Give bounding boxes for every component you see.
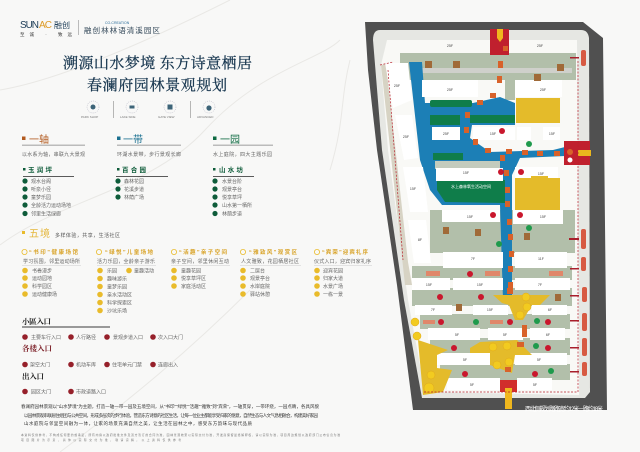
list: scene four: 驿站休憩	[250, 291, 270, 298]
legal note: 本资料仅供参考，不构成任何要约或承诺，所有内容以政府批准文件及双方签订的合同为准，园林景观效果以实际交付为准，开发商保留最终解释权，请以实际为准，项目周边规划以政府部门公布信息为准	[21, 433, 340, 437]
list: scene one: 书卷漫步	[32, 268, 52, 274]
list: scene two: 活力乐园，全龄亲子游乐	[97, 258, 155, 265]
building labels: 25F	[447, 88, 454, 92]
list: community entrances: 次入口大门	[158, 334, 183, 341]
list: third garden: 水景台阶	[222, 178, 242, 185]
panel: one garden: 水上庭院，四大主题乐园	[213, 151, 272, 158]
list: scene one: 运动园地	[32, 275, 52, 282]
list: exits	[22, 371, 106, 396]
list: second garden: 林荫广场	[124, 194, 144, 201]
map shadow border	[365, 22, 607, 410]
project name: CO-CREATION	[105, 21, 130, 25]
building labels: 25F	[540, 88, 547, 92]
panel: one belt	[117, 134, 181, 158]
yellow activity zones	[418, 98, 560, 395]
panel: one axis: 以水系为轴，串联九大景观	[22, 151, 85, 158]
list: first garden: 听泉小径	[31, 186, 51, 193]
description paragraph: 以园林景观串联居住组团与公共空间，形成多层次的步行体验，营造东方诗意的社区生活，让每一位业主都能享受归家的惬意，自然生态与人文气息相融合，构建美好家园	[24, 412, 319, 419]
panel: one garden	[213, 134, 273, 158]
green lawns	[430, 100, 515, 203]
orange circulation route	[464, 61, 560, 372]
brand logo: SUN	[20, 20, 39, 31]
map lawn label: 水上森林氧生活动空间	[451, 183, 491, 189]
list: exits: 市政道路入口	[76, 388, 106, 396]
red boundary line	[380, 60, 578, 392]
list: scene two: 科学探索区	[107, 300, 132, 306]
brand logo: AC	[39, 20, 52, 31]
list: community entrances	[22, 316, 183, 341]
list: scene three: 家庭活动区	[181, 283, 206, 290]
building labels: 5F	[533, 383, 538, 387]
building labels: 15F	[426, 283, 433, 287]
list: building entrances: 各楼入口	[22, 343, 52, 353]
list: second garden	[115, 165, 168, 201]
building labels: 6F	[546, 333, 551, 337]
list: building entrances: 住宅单元门禁	[112, 362, 142, 368]
building labels: 15F	[463, 171, 470, 175]
list: scene two: 乐园	[107, 268, 117, 274]
brand logo	[20, 20, 72, 38]
right gate	[564, 141, 591, 165]
yellow markers	[411, 293, 531, 393]
list: scene five: 迎宾花园	[323, 268, 343, 274]
list: community entrances: 小區入口	[22, 316, 51, 326]
list: third garden: 观景亭台	[222, 186, 242, 193]
list: scene four: 水岸庭院	[250, 283, 270, 290]
river and lagoon	[409, 62, 565, 300]
list: exits: 园区大门	[31, 388, 51, 396]
building labels: 15F	[467, 215, 474, 219]
panel: one belt: 一带	[123, 134, 143, 146]
salmon parking labels	[423, 271, 563, 324]
site plan map	[365, 22, 607, 413]
legal note	[21, 433, 340, 442]
landscape pavilions	[425, 61, 564, 311]
road caption: 西北侧规划路路宽约12米一路约18米	[525, 405, 603, 413]
list: third garden: 悦享草坪	[222, 194, 242, 201]
four feature icons	[81, 101, 215, 119]
four feature icons: ADVANCED	[197, 115, 214, 119]
list: scene two: 童趣活动	[134, 268, 154, 274]
building labels: 8F	[418, 238, 423, 242]
heading: five scenes: 五境	[29, 227, 50, 240]
list: scene five: 水景广场	[323, 283, 343, 290]
list: scene four: 观景亭台	[250, 275, 270, 282]
list: third garden: 山水第一栖所	[222, 202, 252, 209]
list: community entrances: 人行路径	[76, 334, 96, 341]
building labels: 11F	[538, 257, 545, 261]
list: scene one	[22, 248, 81, 298]
building labels: 15F	[549, 132, 556, 136]
building labels: 25F	[394, 84, 401, 88]
list: third garden	[212, 165, 254, 218]
list: scene three: 悦享草坪区	[181, 275, 206, 282]
list: scene one: 学习氛围，邻里运动场所	[23, 258, 80, 265]
building labels: 25F	[443, 132, 450, 136]
list: building entrances: 机动车库	[76, 362, 96, 368]
list: first garden: 童梦乐园	[31, 194, 51, 201]
building labels: 5F	[455, 333, 460, 337]
list: community entrances: 主要车行入口	[31, 334, 61, 341]
list: scene three: 童趣花园	[181, 268, 201, 274]
description paragraph: 春澜府园林景观以“山水梦境”为主题，打造一轴一带一园及五境空间，从“书印”“绿悦”“活趣”“雅致”到“宾荣”，一轴贯穿，一带环绕，一园点睛，各具风貌	[21, 403, 320, 410]
list: scene four: 人文雅致，花园栖居社区	[241, 258, 299, 265]
building labels: 5F	[470, 383, 475, 387]
building labels	[394, 44, 556, 387]
list: scene two: “绿悦”儿童场地	[105, 248, 153, 256]
panel: one axis: 一轴	[29, 133, 49, 146]
list: scene two	[96, 248, 156, 314]
heading: five scenes: 多样体验，共享，生活社区	[55, 232, 120, 239]
panel: one belt: 环湖水景带，步行景观长廊	[117, 151, 181, 158]
list: scene five: “宾荣”迎宾礼序	[322, 248, 368, 256]
left road strip	[381, 64, 412, 285]
lawn walkway band	[435, 161, 500, 169]
title: 春澜府园林景观规划	[87, 77, 227, 94]
building labels: 15F	[490, 132, 497, 136]
description paragraph	[21, 403, 320, 427]
list: scene three: “活趣”亲子空间	[179, 248, 227, 256]
building labels: 5F	[503, 333, 508, 337]
residential buildings	[385, 63, 570, 390]
title: 溯源山水梦境 东方诗意栖居	[63, 54, 252, 72]
list: exits: 出入口	[22, 371, 44, 381]
list: scene one: 运动健康场	[32, 291, 57, 298]
building labels: 15F	[538, 172, 545, 176]
legal note: 项目图片为示意，具体以实际交付为准，敬请谅解，以上资料仅供参考	[21, 438, 181, 442]
landscape ground	[400, 53, 576, 380]
brand logo: 至诚 · 致远	[20, 31, 72, 38]
panel: one axis	[22, 133, 85, 158]
list: scene three: 亲子空间，邻里休闲互动	[171, 258, 229, 265]
building labels: 25F	[537, 44, 544, 48]
list: scene five: 一栋一景	[323, 291, 343, 298]
building labels: 25F	[447, 44, 454, 48]
list: scene two: 童梦乐园	[107, 284, 127, 290]
right road with red arrows	[569, 50, 587, 376]
brand logo: 融创	[54, 20, 70, 30]
list: first garden: 观水台阁	[31, 178, 51, 185]
list: second garden: 森林花园	[124, 178, 144, 185]
red and green unit markers	[437, 128, 554, 377]
four feature icons: GATE VIEW	[158, 115, 175, 119]
building labels: 7F	[471, 257, 476, 261]
building labels: 15F	[410, 187, 417, 191]
list: scene two: 亲水活动区	[107, 292, 132, 298]
bottom gate	[500, 380, 517, 409]
list: building entrances: 架空大门	[30, 362, 50, 368]
list: community entrances: 景观步道入口	[113, 334, 143, 341]
site ground	[373, 30, 590, 398]
list: first garden	[22, 165, 74, 218]
list: first garden: 全龄活力运动场地	[31, 202, 71, 209]
list: second garden: 百合园	[122, 165, 146, 174]
top gate	[490, 29, 509, 55]
list: scene two: 沙坑乐场	[107, 308, 127, 314]
building labels: 15F	[540, 215, 547, 219]
panel: one garden: 一园	[220, 134, 240, 146]
heading: five scenes	[22, 227, 120, 240]
list: scene five	[314, 248, 372, 298]
description paragraph: 山水庭院与邻里空间融为一体，让家的场景充满自然之美，让生活在园林之中，感受东方韵味与现代品质	[24, 420, 252, 427]
building labels: 7F	[538, 283, 543, 287]
title	[63, 54, 252, 94]
building labels: 5F	[463, 358, 468, 362]
four feature icons: LAKE SIDE	[120, 115, 136, 119]
list: third garden: 林荫步道	[222, 210, 242, 218]
list: first garden: 邻里生活绿廊	[31, 210, 61, 218]
list: second garden: 花溪步道	[124, 186, 144, 193]
list: scene five: 仪式入口，迎宾归家礼序	[314, 258, 371, 265]
list: scene four: “雅致风”观赏区	[249, 248, 297, 256]
building labels: 25F	[403, 135, 410, 139]
list: scene two: 趣味游乐	[107, 276, 127, 282]
list: scene three	[171, 248, 230, 290]
project name: 融创林林语清溪园区	[84, 25, 160, 35]
residential white ground	[381, 40, 579, 395]
list: scene one: 科学园区	[32, 283, 52, 290]
list: scene one: “书印”健康场馆	[29, 248, 78, 256]
list: scene four: 二层台	[250, 268, 265, 274]
project name	[78, 20, 160, 35]
four feature icons: PARK SHOP	[81, 115, 98, 119]
list: building entrances	[22, 343, 178, 368]
building labels: 7F	[431, 308, 436, 312]
building labels: 5F	[537, 358, 542, 362]
list: scene five: 归家大道	[323, 275, 343, 282]
building labels: 15F	[487, 308, 494, 312]
building labels: 15F	[477, 283, 484, 287]
list: third garden: 山水坊	[219, 165, 244, 174]
list: scene four	[240, 248, 301, 298]
list: building entrances: 连廊出入	[158, 362, 178, 368]
building labels: 6F	[548, 308, 553, 312]
list: first garden: 玉润坪	[28, 165, 52, 174]
